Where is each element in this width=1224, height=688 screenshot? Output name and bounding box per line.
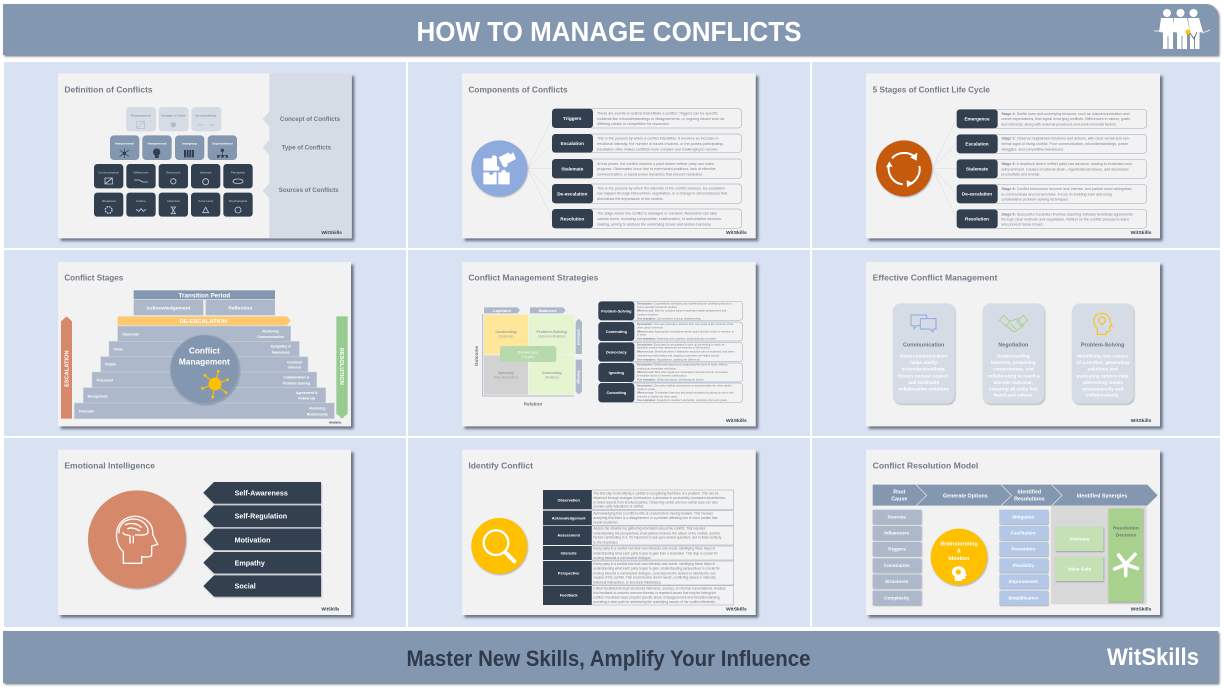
card: communication xyxy=(893,303,955,404)
component rows: These are events or actions that initiate a conflict. Triggers can be specific xyxy=(597,112,718,116)
strategy matrix: Lopsided xyxy=(493,308,511,313)
transition period block xyxy=(134,290,275,315)
resolutions list xyxy=(999,510,1048,605)
strategy matrix: Contending xyxy=(495,330,517,334)
sources rows: Psychological xyxy=(229,199,247,203)
stage rows: De-escalation xyxy=(962,192,992,197)
strategy rows: needs or goals. xyxy=(637,387,656,391)
heading: 5 Stages of Conflict Life Cycle xyxy=(873,85,990,95)
steps table: Acknowledgement xyxy=(552,516,586,520)
connector lines xyxy=(528,118,552,218)
component rows: Escalation often makes conflicts more complex and challenging to resolve. xyxy=(597,147,719,151)
steps table: Observation xyxy=(557,499,580,503)
card: problem-solving: Problem-Solving xyxy=(1081,342,1124,348)
steps table: understanding what each party hopes to gain. Understanding perspectives is crucial for xyxy=(593,567,721,571)
component rows: Resolution xyxy=(560,216,585,221)
strategy rows: Use examples: Agreeing to another's demands, overlying one's own goals. xyxy=(637,398,728,402)
icon: magnifier in circle xyxy=(471,518,527,574)
card: communication: helps clarify xyxy=(910,360,938,365)
component rows: various forms, including compromise, collaboration, or authoritative decision- xyxy=(597,217,723,221)
card: negotiation: interests, proposing xyxy=(991,360,1036,365)
header banner xyxy=(3,4,1218,55)
component rows: The stage where the conflict is managed or resolved. Resolution can take xyxy=(597,212,717,216)
strategy rows: Description: Deliberately ignoring or postponing the issue at hand, without xyxy=(637,363,727,367)
panel: effective conflict management xyxy=(812,250,1220,436)
heading: Definition of Conflicts xyxy=(64,85,153,95)
steps table: The first step in identifying a conflict is recognising that there is a problem. This can be xyxy=(593,491,719,495)
strategy rows: immediate action or intense collaboration. xyxy=(637,374,687,378)
component rows: De-escalation xyxy=(557,191,588,196)
panel: definition of conflicts xyxy=(4,62,406,248)
heading: Emotional Intelligence xyxy=(64,461,155,471)
steps table xyxy=(543,490,734,605)
stage rows: collaborative problem-solving techniques. xyxy=(1001,197,1069,201)
steps table: historical interactions, or structural imbalances. xyxy=(593,580,662,584)
strategy rows: Description: Each party is encouraged to give up something to reach an xyxy=(637,342,725,346)
root cause list: Structures xyxy=(885,579,909,584)
synergies area: Resolution xyxy=(1113,525,1139,531)
central circle: Management xyxy=(179,357,230,367)
pentagon list: Self-Awareness xyxy=(235,489,288,497)
resolutions list: Flexibility xyxy=(1013,563,1034,568)
strategy rows: in crisis. xyxy=(637,333,647,337)
root cause list xyxy=(873,510,921,605)
concept row: Disagreement xyxy=(131,114,151,118)
transition period block: Acknowledgement xyxy=(146,306,191,312)
card: communication: Good communication xyxy=(900,353,948,358)
brand mark: WitSkills xyxy=(726,418,747,424)
staircase xyxy=(74,326,334,419)
steps table: causes of the conflict. This could involve unmet needs, conflicting values or interests, xyxy=(593,576,717,580)
steps table: moving towards a constructive dialogue. xyxy=(593,556,652,560)
footer banner xyxy=(3,631,1218,683)
component rows: can happen through intervention, negotiation, or a change in circumstances that xyxy=(597,192,727,196)
icon: three people in conflict xyxy=(1154,9,1210,49)
card: negotiation: ensuring all sides feel xyxy=(989,387,1038,392)
staircase: Communication xyxy=(258,335,284,339)
component rows: making, aiming to address the underlying issues and restore harmony. xyxy=(597,222,712,226)
card: negotiation: Negotiation xyxy=(998,342,1029,348)
sources rows: Situational xyxy=(102,199,116,203)
sidebar labels: Type of Conflicts xyxy=(282,144,332,151)
strategy rows: interests to satisfy the other party. xyxy=(637,394,678,398)
sidebar labels: Sources of Conflicts xyxy=(279,187,339,194)
strategy matrix: Outcome xyxy=(474,346,479,366)
strategy matrix: (Outcome) xyxy=(499,335,513,339)
steps table: conflict. Feedback helps pinpoint specific areas of disagreement and misunderstanding, xyxy=(593,595,721,599)
strategy rows: equitable solution that addresses the interests of all involved. xyxy=(637,346,711,350)
component rows: emotional intensity, the number of issues involved, or the parties participating. xyxy=(597,142,724,146)
concept row: Incompatibility xyxy=(195,114,217,118)
pentagon list: Social xyxy=(235,583,256,591)
icon: head with bulb xyxy=(952,566,967,581)
stage rows xyxy=(957,109,1147,228)
icon: joined hands xyxy=(1115,554,1137,576)
escalation arrow: ESCALATION xyxy=(65,350,71,387)
card: negotiation xyxy=(983,303,1044,404)
stage rows: productivity and morale. xyxy=(1001,172,1040,176)
strategy rows: When to use: Best when goals are moderately important but do not require xyxy=(637,370,728,374)
staircase: Recognised xyxy=(88,394,107,398)
component rows: incidents like misunderstandings or disagreements, or ongoing issues such as xyxy=(597,117,724,121)
strategy matrix xyxy=(474,307,582,407)
central circle: Conflict xyxy=(189,346,220,356)
de-escalation arrow: DE-ESCALATION xyxy=(180,319,227,325)
process chevron bar xyxy=(873,485,1158,506)
connector lines xyxy=(932,118,957,218)
steps table: this feedback to uncover common themes or repeated issues that may be driving the xyxy=(593,591,716,595)
sidebar labels: Concept of Conflicts xyxy=(280,116,341,123)
resolutions list: Mitigation xyxy=(1012,514,1034,519)
process chevron bar: Root xyxy=(893,490,906,496)
strategy rows xyxy=(598,301,743,402)
strategy matrix: Relation xyxy=(524,402,542,407)
component rows: diminishes the importance of the conflict. xyxy=(597,197,664,201)
sources rows: Resources xyxy=(166,171,181,175)
strategy matrix: (Outcome-Relation) xyxy=(538,335,565,339)
card: problem-solving: collaboratively. xyxy=(1086,393,1119,398)
card: negotiation: win-win outcome, xyxy=(993,380,1033,385)
icon: handshake xyxy=(999,315,1028,332)
sources rows xyxy=(94,164,253,217)
component rows: At this phase, the conflict reaches a point where neither party can make xyxy=(597,162,714,166)
root cause list: Triggers xyxy=(887,547,906,552)
staircase: Perceived xyxy=(97,378,113,382)
pentagon list: Self-Regulation xyxy=(235,513,287,521)
synergies area xyxy=(1051,506,1147,604)
strategy rows: Democracy xyxy=(606,350,628,354)
strategy rows: When to use: Beneficial when a balanced resolution can be achieved, and when xyxy=(637,350,735,354)
card: communication: and facilitates xyxy=(908,380,940,385)
steps table: Assess the situation by gathering information about the conflict. This includes xyxy=(593,527,706,531)
strategy matrix: Manage xyxy=(576,371,580,384)
stage rows: through clear methods and negotiation. Reflect on the conflict process to learn xyxy=(1001,217,1129,221)
strategy matrix: Democracy xyxy=(518,350,539,354)
strategy rows: When to use: To maintain harmony and avoid escalation by giving up one's own xyxy=(637,391,734,395)
icon: yellow burst xyxy=(201,370,229,398)
card: problem-solving: evaluating options help xyxy=(1077,373,1129,378)
stage rows: unmet expectations, that signal emerging conflicts. Differences in values, goals, xyxy=(1001,117,1131,121)
sources rows: Historical xyxy=(167,199,180,203)
brand mark: WitSkills xyxy=(1131,418,1152,424)
stage rows: Stage 3: A deadlock where neither party can advance, leading to frustration and xyxy=(1001,162,1132,166)
strategy matrix: Problem-Solving xyxy=(536,330,568,334)
strategy rows: Use examples: Negotiations, splitting the difference. xyxy=(637,357,701,361)
stage rows: verbal signs of rising conflict. Poor communication, misunderstandings, power xyxy=(1001,142,1129,146)
process chevron bar: Resolutions xyxy=(1014,497,1045,503)
central circle xyxy=(170,335,239,404)
steps table: to the responses. xyxy=(593,540,619,544)
card: problem-solving: systematically and xyxy=(1082,387,1124,392)
stage rows: entrenchment. Causes emotional strain, organizational issues, and decreased xyxy=(1001,167,1128,171)
transition period block: Transition Period xyxy=(178,293,230,300)
component rows: This is the process by which a conflict intensifies. It involves an increase in xyxy=(597,137,719,141)
icon: speech bubbles xyxy=(911,315,936,332)
card: communication: Communication xyxy=(903,342,945,348)
strategy matrix: Enforced xyxy=(576,329,580,345)
strategy rows: Description: One party striving to achieve their own goals at the expense of the xyxy=(637,322,734,326)
strategy matrix: (Equality) xyxy=(521,355,535,359)
strategy rows: seeking an immediate resolution. xyxy=(637,366,677,370)
steps table: needs resolution. xyxy=(593,521,618,525)
stage rows: Emergence xyxy=(964,117,990,122)
strategy matrix: Balanced xyxy=(539,308,557,313)
steps table: or direct reports from involved parties. Observing verbal and non-verbal cues can also xyxy=(593,500,718,504)
brainstorming circle xyxy=(931,529,987,585)
icon: brain head in circle xyxy=(88,490,186,588)
root cause list: Complexity xyxy=(884,596,910,601)
sources rows: Interests xyxy=(200,171,212,175)
sources rows: Culture xyxy=(136,199,146,203)
strategy rows: creative solutions. xyxy=(637,312,659,316)
stage rows: Escalation xyxy=(965,142,989,147)
stage rows: Stage 5: Successful resolution involves reaching mutually beneficial agreements xyxy=(1001,212,1133,216)
pentagon list: Motivation xyxy=(235,536,270,544)
strategy rows: Ignoring xyxy=(609,371,625,375)
component rows: Escalation xyxy=(561,141,584,146)
steps table: Interests xyxy=(561,551,577,555)
root cause list: Sources xyxy=(887,514,906,519)
steps table: understanding what each party hopes to gain from a resolution. This step is crucial for xyxy=(593,551,719,555)
stage rows: Stage 2: Observe heightened emotions and actions, with clear verbal and non- xyxy=(1001,137,1131,141)
stage rows: struggles, and competitive behaviours. xyxy=(1001,147,1064,151)
staircase: Common xyxy=(287,360,302,364)
process chevron bar: Generate Options xyxy=(943,493,988,499)
heading: Components of Conflicts xyxy=(468,85,568,95)
strategy rows: Problem-Solving xyxy=(601,309,632,313)
strategy rows: Description: One party making concessions to accommodate the other party's xyxy=(637,383,732,387)
steps table: provide early indications of conflict. xyxy=(593,505,644,509)
resolution arrow: RESOLUTION xyxy=(338,348,344,385)
sources rows: Communication xyxy=(98,171,119,175)
transition period block: Reflection xyxy=(228,306,252,312)
staircase: Follow Up xyxy=(298,397,315,401)
sidebar xyxy=(263,73,352,238)
steps table: Every party in a conflict has their own interests and needs. Identifying these helps in xyxy=(593,547,715,551)
strategy matrix: (Non-Resolution) xyxy=(494,376,518,380)
heading: Effective Conflict Management xyxy=(873,273,997,283)
panel: conflict management strategies xyxy=(408,250,810,436)
pentagon list: Empathy xyxy=(235,560,265,568)
tagline: Master New Skills, Amplify Your Influence xyxy=(406,646,810,671)
brand mark: WitSkills xyxy=(1131,607,1152,613)
stage rows: Resolution xyxy=(965,217,989,222)
resolutions list: Prevention xyxy=(1011,547,1036,552)
concept row xyxy=(126,107,221,131)
steps table: Acknowledging that a conflict exists is crucial before moving forward. This involves xyxy=(593,511,713,515)
panel: conflict resolution model xyxy=(812,438,1220,627)
sources rows: Differences xyxy=(133,171,149,175)
title: HOW TO MANAGE CONFLICTS xyxy=(416,16,802,47)
icon: cycle arrows in circle xyxy=(876,140,932,196)
resolutions list: Improvement xyxy=(1009,579,1038,584)
type row: Organizational xyxy=(212,142,233,146)
heading: Conflict Management Strategies xyxy=(468,273,599,283)
root cause list: Constraints xyxy=(884,563,910,568)
card: problem-solving: of a conflict, generating xyxy=(1076,360,1129,365)
strategy rows: Description: Cooperatively identifying and addressing the underlying issues to xyxy=(637,302,732,306)
strategy rows: When to use: Best for complex issues requiring multiple perspectives and xyxy=(637,309,727,313)
brand mark: WitSkills xyxy=(1131,230,1152,236)
brand mark: WitSkills xyxy=(321,230,342,236)
card: communication: fosters mutual respect, xyxy=(898,373,949,378)
resolutions list: Simplification xyxy=(1008,596,1039,601)
heading: Conflict Stages xyxy=(64,273,124,283)
staircase: Collaboration & xyxy=(283,376,310,380)
card: negotiation: Understanding xyxy=(997,353,1030,358)
panel: components of conflicts xyxy=(408,62,810,248)
strategy matrix: Ignoring xyxy=(498,371,514,375)
staircase: Potential xyxy=(79,409,94,413)
synergies area: Interests xyxy=(1070,537,1090,542)
staircase: Relationship xyxy=(307,412,328,416)
strategy rows: Contending xyxy=(606,330,628,334)
sources rows: Community xyxy=(198,199,214,203)
staircase: Ground xyxy=(288,365,301,369)
panel: 5 stages of conflict life cycle xyxy=(812,62,1220,248)
card: problem-solving: Identifying root causes xyxy=(1077,353,1129,358)
steps table: moving towards a constructive dialogue. Look beyond the surface to identify the root xyxy=(593,571,716,575)
component rows: This is the process by which the intensity of the conflict reduces. De-escalation xyxy=(597,187,725,191)
staircase: Awareness xyxy=(271,350,290,354)
staircase: Agreement & xyxy=(296,391,318,395)
component rows: Stalemate xyxy=(561,166,584,171)
card: communication: misunderstandings, xyxy=(902,367,946,372)
stage rows: and interests, along with external pressures and environmental factors. xyxy=(1001,122,1117,126)
card: problem-solving: addressing issues xyxy=(1082,380,1123,385)
pentagon list xyxy=(203,482,321,597)
brand mark: WitSkills xyxy=(726,230,747,236)
component rows: Triggers xyxy=(563,116,582,121)
component rows xyxy=(552,109,742,228)
sources rows: Perception xyxy=(231,171,245,175)
staircase: Restoring xyxy=(309,407,325,411)
type row xyxy=(110,135,237,160)
steps table: observed through changes in behaviour, a decrease in productivity, increased absenteeism, xyxy=(593,496,726,500)
panel: identify conflict xyxy=(408,438,810,627)
footer brand: WitSkills xyxy=(1107,644,1199,671)
brainstorming circle: & xyxy=(957,549,961,555)
brand mark: WitSkills xyxy=(321,607,340,612)
steps table: factors contributing to it. It's important to ask open-ended questions and to listen actively xyxy=(593,536,722,540)
card: problem-solving xyxy=(1072,303,1134,404)
synergies area: Decision xyxy=(1116,533,1136,539)
staircase: Sympathy & xyxy=(271,345,291,349)
steps table: Assessment xyxy=(557,534,581,538)
concept row: Struggle or Clash xyxy=(161,114,186,118)
stage rows: to communicate and compromise. Focus on building trust and using xyxy=(1001,192,1112,196)
brand mark: WitSkills xyxy=(726,607,747,613)
strategy rows: other party's interests. xyxy=(637,325,664,329)
strategy rows: Use examples: Delay discussion, dismissing an issues. xyxy=(637,378,705,382)
heading: Conflict Resolution Model xyxy=(873,461,978,471)
root cause list: Influencers xyxy=(884,531,909,536)
steps table: Perspective xyxy=(558,572,579,576)
icon: puzzle in circle xyxy=(471,140,527,196)
brainstorming circle: Brainstorming xyxy=(940,541,978,547)
card: communication: collaborative solutions xyxy=(898,387,949,392)
resolution arrow xyxy=(336,316,348,419)
brainstorming circle: Ideation xyxy=(948,556,970,562)
card: negotiation: collaborating to reach a xyxy=(987,373,1040,378)
strategy rows: Use examples: Asserting one's position, using authority or power. xyxy=(637,337,717,341)
strategy matrix: (Relation) xyxy=(545,376,559,380)
staircase: Stalemate xyxy=(122,332,139,336)
component rows: communication, or equal power dynamics that prevent resolution. xyxy=(597,172,703,176)
component rows: progress. Stalemates occur due to entrenched positions, lack of effective xyxy=(597,167,716,171)
resolutions list: Facilitation xyxy=(1011,531,1036,536)
steps table: Feedback xyxy=(560,593,578,597)
staircase: Crisis xyxy=(113,347,123,351)
card: negotiation: heard and valued. xyxy=(994,393,1033,398)
panel: emotional intelligence xyxy=(4,438,406,627)
stage rows: Stage 1: Subtle cues and underlying tensions, such as miscommunication and xyxy=(1001,112,1129,116)
stage rows: Stage 4: Conflict behaviours become less intense, and parties show willingness xyxy=(1001,187,1132,191)
process chevron bar: Identified Synergies xyxy=(1077,493,1127,499)
stage rows: and prevent future issues. xyxy=(1001,223,1044,227)
steps table: providing a clear path for addressing the underlying causes of the conflict effectively. xyxy=(593,600,716,604)
staircase: Visible xyxy=(105,363,116,367)
type row: Intergroup xyxy=(182,142,197,146)
steps table: understanding the perspectives of all parties involved, the nature of the conflict, and the xyxy=(593,531,720,535)
strategy matrix: Conceding xyxy=(542,371,562,375)
type row: Interpersonal xyxy=(115,142,134,146)
steps table: Collect feedback through structured interviews, surveys, or informal conversations. Analyse xyxy=(593,586,726,590)
strategy rows: maintaining relationships and ongoing cooperation are highly valued. xyxy=(637,353,720,357)
sidebar labels xyxy=(279,116,341,194)
brand mark: WitSkills xyxy=(329,421,342,425)
synergies area: Value Gain xyxy=(1067,567,1091,572)
process chevron bar: Identified xyxy=(1017,490,1041,496)
staircase: Problem Solving xyxy=(283,381,310,385)
strategy rows: find a mutually beneficial solution. xyxy=(637,305,678,309)
component rows: differing values or competition for resources. xyxy=(597,122,669,126)
escalation arrow xyxy=(61,316,72,419)
steps table: accepting that there is a disagreement or a problem affecting one or more parties that xyxy=(593,516,717,520)
de-escalation arrow xyxy=(118,316,291,325)
card: negotiation: compromises, and xyxy=(993,367,1034,372)
type row: Intrapersonal xyxy=(148,142,167,146)
panel: conflict stages xyxy=(4,250,406,436)
strategy rows: Use examples: Joint problem solving, brainstorming. xyxy=(637,316,701,320)
icon: head with bulb xyxy=(1094,313,1112,334)
card: problem-solving: solutions and xyxy=(1088,367,1118,372)
process chevron bar: Cause xyxy=(891,497,907,503)
heading: Identify Conflict xyxy=(468,461,533,471)
steps table: Every party in a conflict has their own interests and needs. Identifying these helps in xyxy=(593,562,715,566)
strategy rows: Conceding xyxy=(606,391,627,395)
staircase: Restoring xyxy=(263,330,279,334)
stage rows: Stalemate xyxy=(966,167,988,172)
strategy rows: When to use: Appropriate in situations where quick decisive action is needed, or xyxy=(637,329,734,333)
